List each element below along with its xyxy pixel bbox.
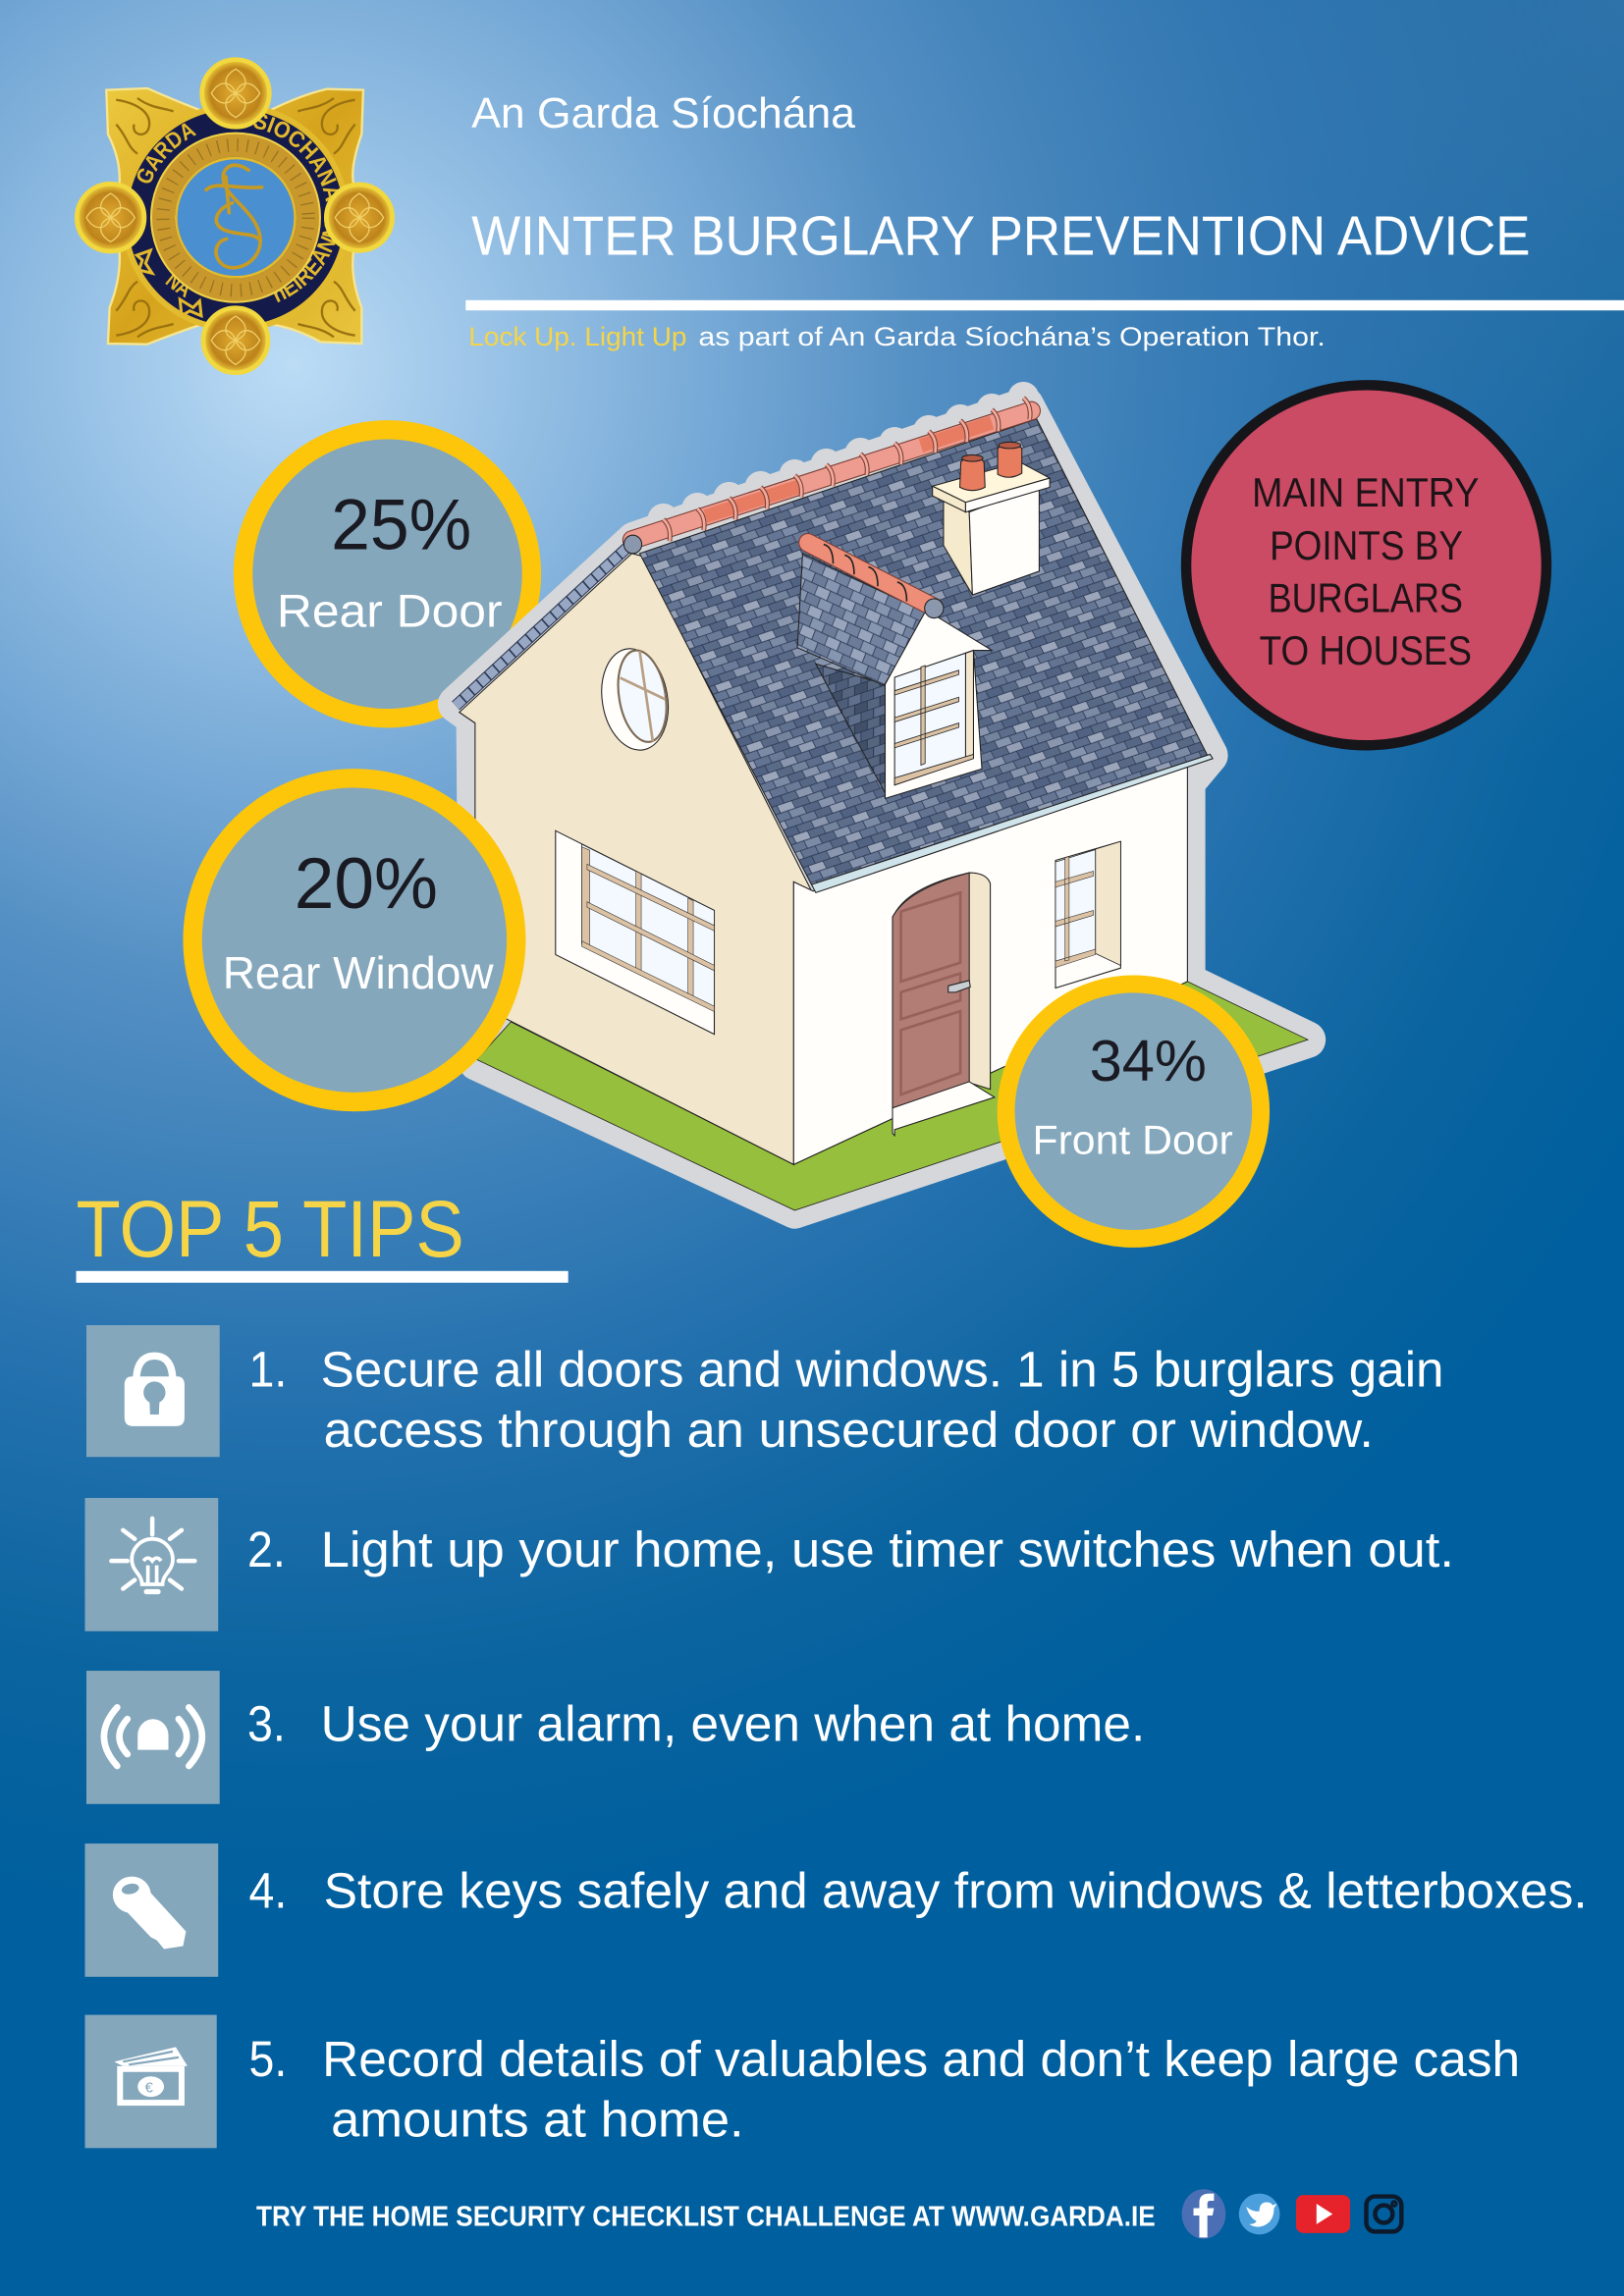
badge gold body [106, 88, 363, 345]
badge inscription: hÉIREANN [274, 224, 336, 302]
badge inscription [137, 114, 338, 302]
tip 5: Record details of valuables and don’t keep large cash [322, 2031, 1520, 2087]
gable verge tiles [456, 545, 630, 706]
dormer gable [886, 610, 992, 798]
large side window [556, 830, 714, 1035]
tip 3 [86, 1671, 1145, 1804]
header: subtitle: as part of An Garda Síochána’s Operation Thor. [698, 322, 1326, 351]
badge inscription: SÍOCHÁNA [253, 114, 338, 202]
stat circle: 25% rear door [244, 430, 531, 719]
header: yellow slogan: Lock Up. Light Up [468, 322, 686, 351]
tip 5: 5. [249, 2031, 287, 2087]
callout: main entry points: TO HOUSES [1260, 627, 1472, 673]
tip 5 [85, 2015, 1520, 2148]
door panels [901, 892, 960, 1095]
footer call to action: TRY THE HOME SECURITY CHECKLIST CHALLENGE AT WWW.GARDA.IE [256, 2201, 1156, 2232]
door step [893, 1082, 995, 1136]
icon: instagram [1367, 2197, 1401, 2231]
badge inscription: GARDA [137, 124, 196, 183]
left cream wall [460, 554, 812, 1164]
header rule [465, 300, 1624, 310]
dormer window [894, 651, 973, 785]
stat circle: 20% rear window [192, 778, 516, 1102]
door handle [948, 981, 970, 992]
callout: main entry points: POINTS BY [1270, 522, 1463, 568]
tip 3: 3. [247, 1696, 286, 1752]
icon: key [85, 1843, 218, 1977]
callout: main entry points [1186, 385, 1546, 745]
callout: main entry points: MAIN ENTRY [1252, 469, 1479, 515]
header: main title: WINTER BURGLARY PREVENTION ADVICE [471, 206, 1531, 268]
right white wall [793, 766, 1187, 1164]
tip 1: access through an unsecured door or window. [324, 1402, 1374, 1458]
tip 5: amounts at home. [331, 2091, 744, 2147]
badge inscription: NA [165, 275, 189, 298]
badge medallions [77, 60, 393, 373]
dormer cheek [816, 664, 886, 793]
stat circle: 20% rear window: Rear Window [223, 947, 494, 998]
stat circle: 34% front door: Front Door [1032, 1116, 1233, 1162]
tip 1: Secure all doors and windows. 1 in 5 burglars gain [321, 1342, 1444, 1398]
stat circle: 34% front door [1006, 984, 1261, 1239]
badge inner patterned ring [163, 145, 308, 291]
badge knots [136, 250, 201, 316]
gutter [812, 754, 1213, 892]
heading rule [77, 1271, 568, 1283]
badge blue centre [176, 158, 296, 277]
dormer ridge [808, 543, 934, 608]
lawn [476, 982, 1308, 1210]
stat circle: 25% rear door: 25% [331, 485, 471, 564]
icon: padlock [86, 1325, 220, 1457]
chimney [933, 442, 1050, 595]
icon: facebook [1182, 2189, 1225, 2239]
dormer [797, 543, 992, 798]
header: organisation name: An Garda Síochána [471, 90, 856, 137]
icon: Garda badge crest [75, 57, 395, 375]
tip 2: Light up your home, use timer switches when out. [321, 1522, 1454, 1577]
stat circle: 20% rear window: 20% [295, 844, 438, 924]
badge monogram [206, 165, 262, 268]
icon: light bulb [85, 1498, 218, 1631]
tip 3: Use your alarm, even when at home. [321, 1696, 1145, 1752]
tip 1 [86, 1325, 1444, 1458]
heading: top 5 tips: TOP 5 TIPS [77, 1185, 464, 1274]
icon: euro notes [85, 2015, 217, 2148]
tip 4: Store keys safely and away from windows & letterboxes. [324, 1863, 1588, 1919]
callout: main entry points: BURGLARS [1269, 575, 1463, 621]
ridge tiles [623, 398, 1031, 554]
icon: youtube [1296, 2195, 1350, 2233]
tip 4: 4. [249, 1863, 287, 1919]
dormer roof [797, 554, 926, 685]
icon: twitter [1239, 2194, 1280, 2234]
small front window [1056, 841, 1120, 988]
roof slates [639, 419, 1208, 884]
door leaf [893, 873, 969, 1108]
chimney pots [960, 455, 985, 491]
tip 4 [85, 1843, 1588, 1977]
house sticker outline [456, 382, 1308, 1210]
badge corner ornaments [116, 98, 355, 337]
stat circle: 25% rear door: Rear Door [277, 585, 503, 637]
icon: euro notes: € [145, 2081, 154, 2097]
round window [594, 643, 676, 756]
tip 2: 2. [247, 1522, 286, 1577]
front door [893, 873, 995, 1136]
house illustration [456, 382, 1308, 1210]
tip 1: 1. [249, 1342, 287, 1398]
icon: alarm [86, 1671, 220, 1804]
badge navy ring [125, 106, 347, 329]
stat circle: 34% front door: 34% [1090, 1028, 1207, 1094]
tip 2 [85, 1498, 1454, 1631]
